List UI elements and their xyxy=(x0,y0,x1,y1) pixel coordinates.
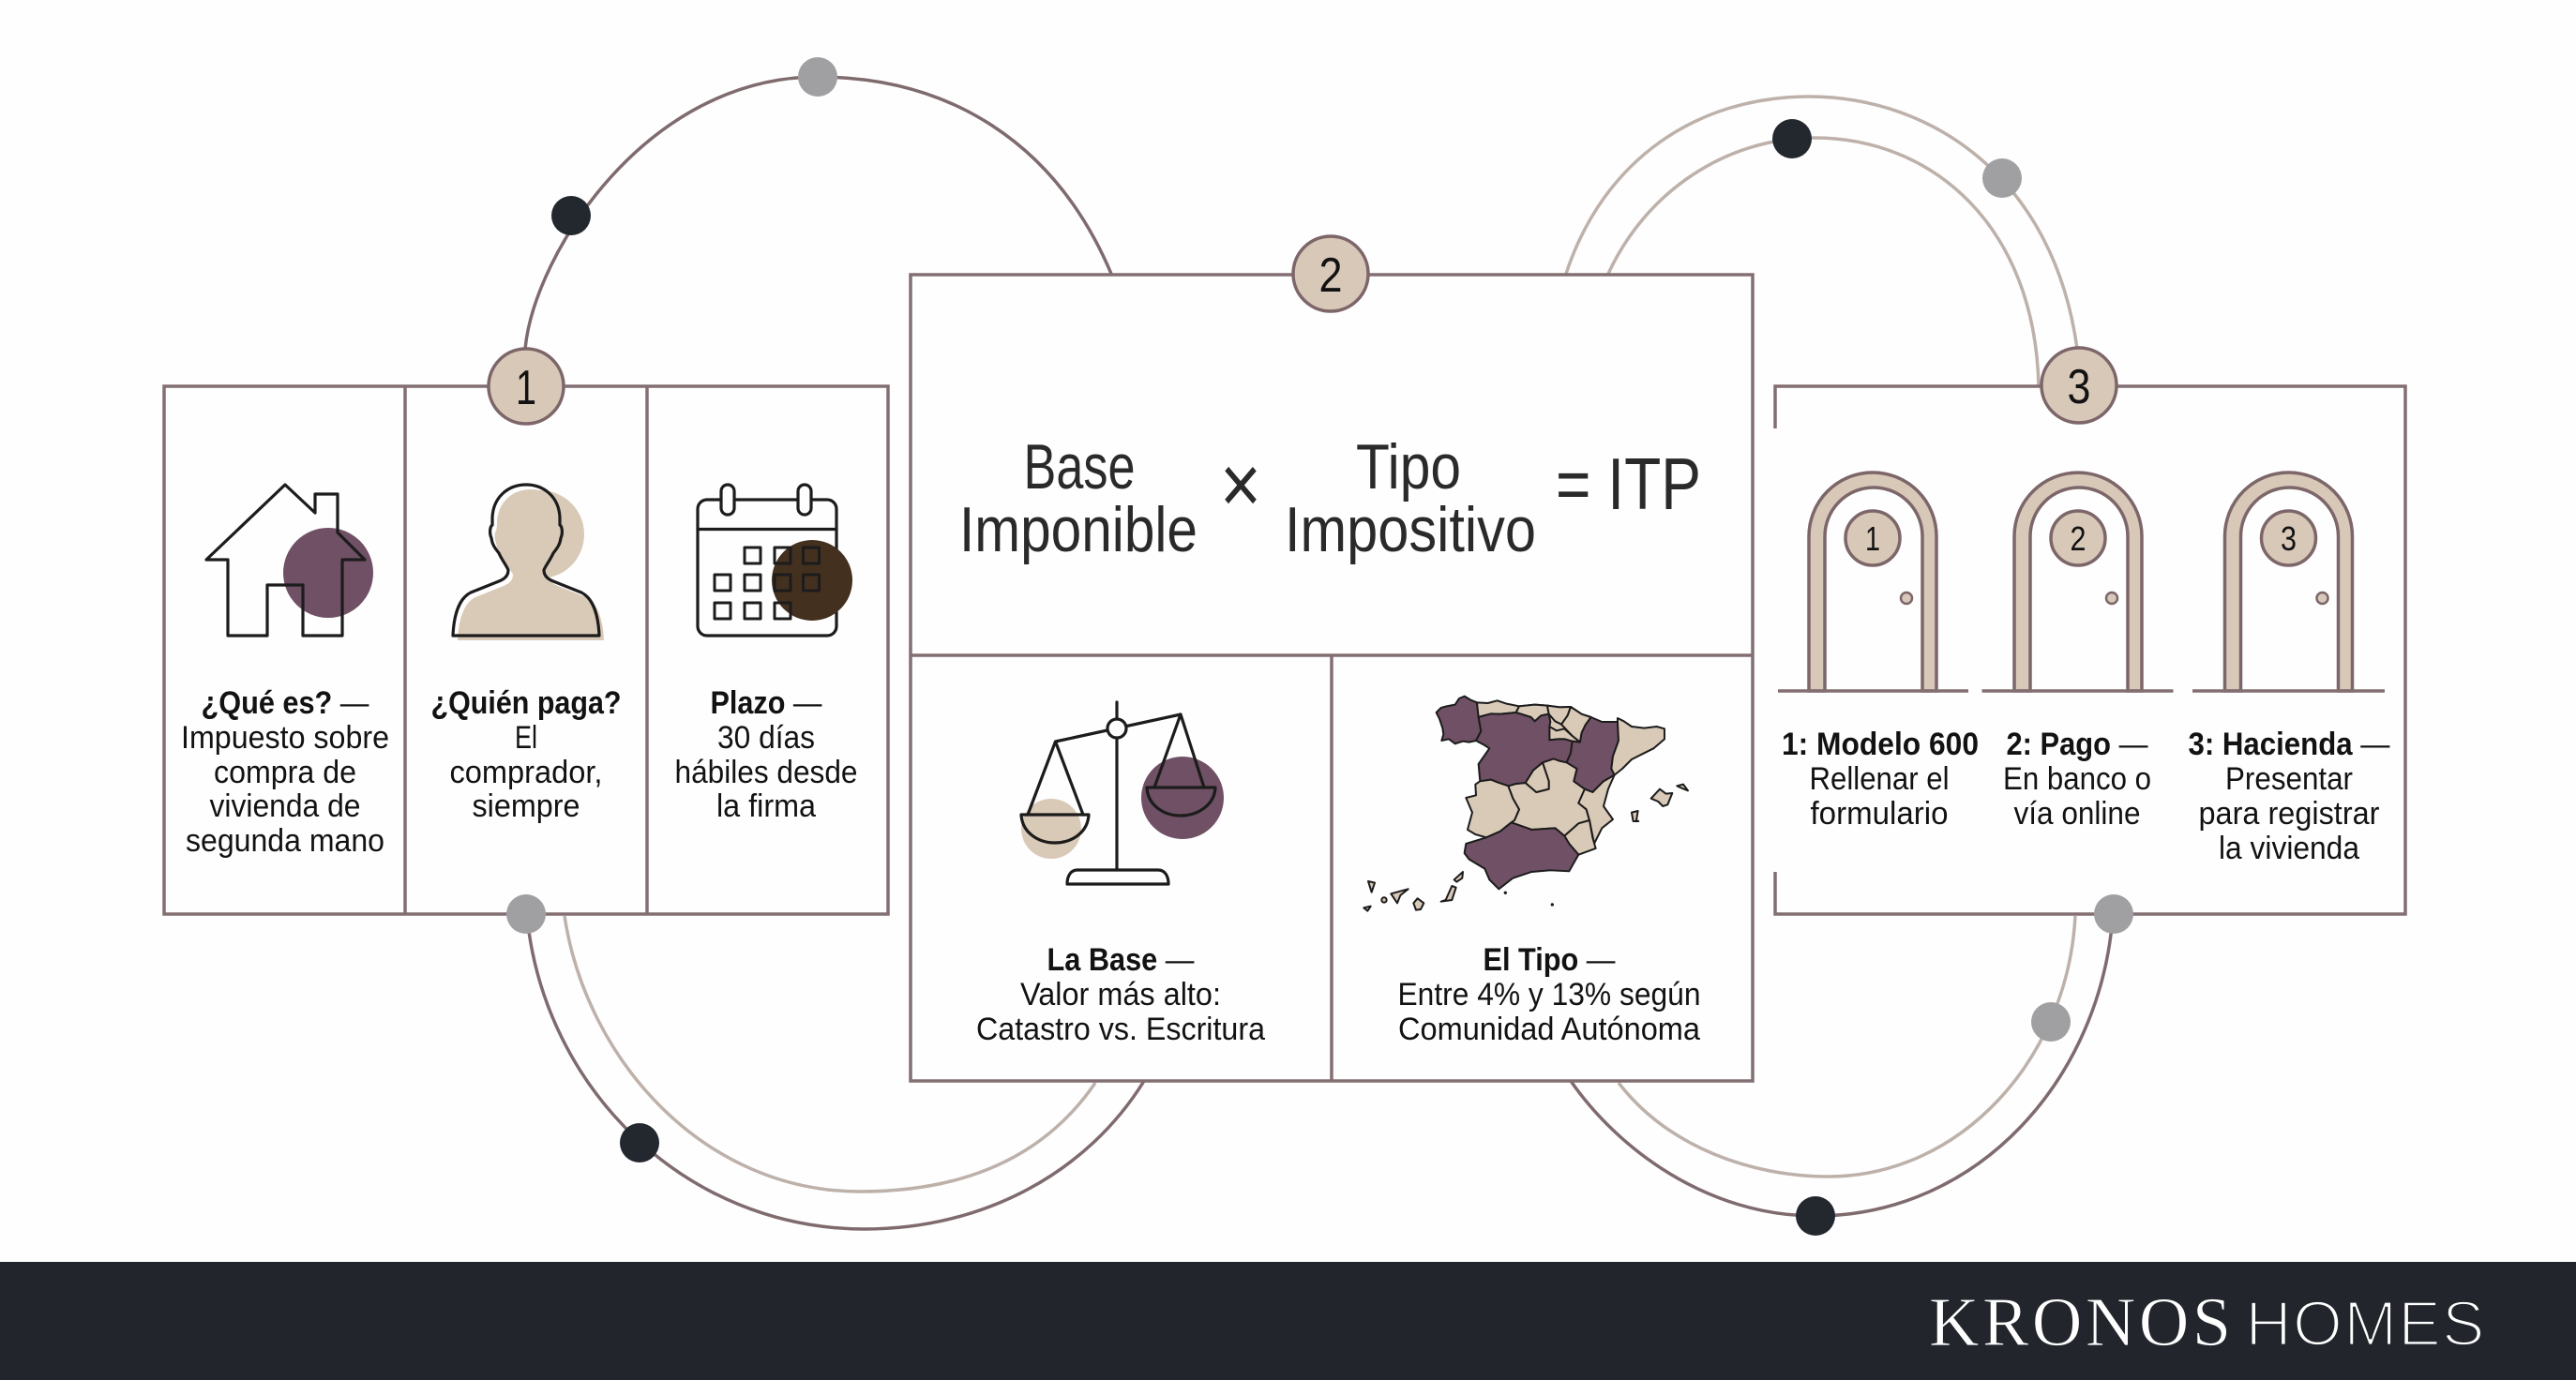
text: quien paga: comprador, xyxy=(450,755,602,790)
icon: house xyxy=(206,485,373,636)
text: el tipo xyxy=(1397,942,1701,1047)
text: que es: Impuesto sobre xyxy=(181,720,389,756)
connector arcs xyxy=(525,77,2113,1229)
formula text: Base xyxy=(1024,431,1135,502)
icon: door 2 xyxy=(1982,472,2174,691)
icon: door 2: 2 xyxy=(2071,519,2086,558)
text: modelo 600 xyxy=(1782,727,1979,832)
text: pago: 2: Pago — xyxy=(2007,727,2147,762)
text: que es: vivienda de xyxy=(210,788,360,824)
panel 2: formula xyxy=(911,275,1753,1081)
icon: door 3: 3 xyxy=(2281,519,2297,558)
text: la base: La Base — xyxy=(1047,942,1195,978)
badge 3 xyxy=(2041,348,2117,423)
text: hacienda: la vivienda xyxy=(2219,831,2359,866)
badge 2: 2 xyxy=(1318,248,1343,303)
text: la base: Valor más alto: xyxy=(1020,977,1221,1012)
text: quien paga: siempre xyxy=(473,788,580,824)
text: plazo: Plazo — xyxy=(711,685,821,721)
text: la base xyxy=(976,942,1265,1047)
text: hacienda: para registrar xyxy=(2198,796,2380,832)
logo: KRONOS xyxy=(1929,1284,2231,1361)
text: modelo 600: formulario xyxy=(1810,796,1949,832)
text: la base: Catastro vs. Escritura xyxy=(976,1012,1265,1047)
formula text: × xyxy=(1220,438,1261,531)
text: hacienda: Presentar xyxy=(2225,761,2353,797)
badge 3: 3 xyxy=(2067,360,2091,414)
badge 1 xyxy=(489,349,564,424)
node dots on arcs xyxy=(506,57,2133,1236)
text: plazo: la firma xyxy=(716,788,816,824)
text: plazo: 30 días xyxy=(717,720,815,756)
formula text: = ITP xyxy=(1556,442,1701,525)
text: pago: vía online xyxy=(2014,796,2140,832)
text: hacienda xyxy=(2189,727,2389,866)
icon: door 1: 1 xyxy=(1865,519,1880,558)
text: quien paga: El xyxy=(515,720,537,756)
icon: calendar xyxy=(698,485,852,636)
text: hacienda: 3: Hacienda — xyxy=(2189,727,2389,762)
badge 1: 1 xyxy=(516,361,536,415)
text: modelo 600: 1: Modelo 600 xyxy=(1782,727,1979,762)
text: el tipo: Comunidad Autónoma xyxy=(1398,1012,1700,1047)
text: plazo xyxy=(675,685,857,824)
text: pago: En banco o xyxy=(2003,761,2151,797)
text: modelo 600: Rellenar el xyxy=(1810,761,1949,797)
badge 2 xyxy=(1293,236,1368,311)
text: que es: ¿Qué es? — xyxy=(201,685,369,721)
formula text: Impositivo xyxy=(1285,494,1536,565)
text: quien paga: ¿Quién paga? xyxy=(431,685,621,721)
formula text: Imponible xyxy=(959,494,1198,565)
map of Spain xyxy=(1363,697,1688,911)
panel 3: steps xyxy=(1775,386,2405,914)
text: que es xyxy=(181,685,389,859)
text: plazo: hábiles desde xyxy=(675,755,857,790)
icon: door 1 xyxy=(1778,472,1968,691)
footer bar xyxy=(0,1262,2576,1380)
icon: scales xyxy=(1021,702,1224,884)
logo xyxy=(1929,1284,2485,1361)
text: pago xyxy=(2003,727,2151,832)
icon: person xyxy=(453,485,604,640)
text: que es: segunda mano xyxy=(186,823,384,859)
text: quien paga xyxy=(431,685,621,824)
logo: HOMES xyxy=(2245,1288,2485,1359)
formula text xyxy=(959,431,1701,565)
text: que es: compra de xyxy=(214,755,356,790)
panel 1: basics xyxy=(164,386,888,914)
formula text: Tipo xyxy=(1356,431,1461,502)
text: el tipo: El Tipo — xyxy=(1484,942,1615,978)
text: el tipo: Entre 4% y 13% según xyxy=(1397,977,1701,1012)
icon: door 3 xyxy=(2192,472,2385,691)
